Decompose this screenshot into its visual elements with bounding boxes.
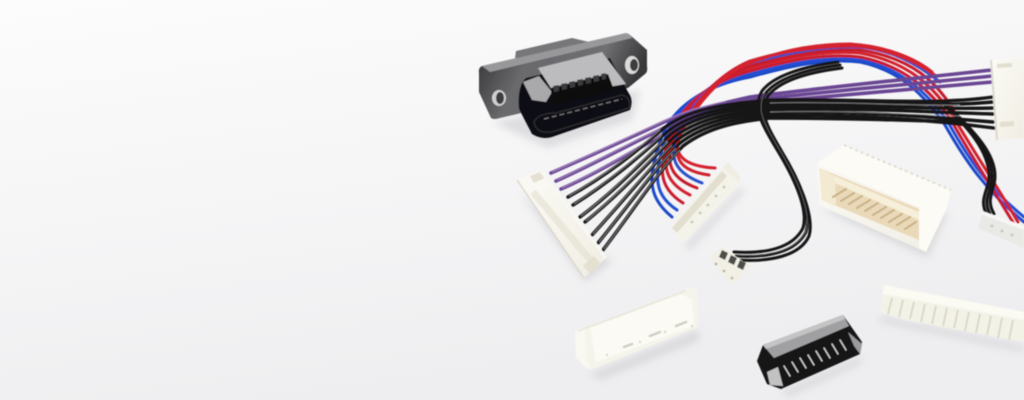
black wires to right lower connector bbox=[944, 104, 995, 214]
three-pin connector bbox=[710, 247, 750, 286]
purple wires bbox=[551, 70, 992, 189]
box header connector bbox=[817, 145, 951, 252]
right wire housing connector bbox=[991, 58, 1024, 140]
right lower connector bbox=[978, 212, 1024, 248]
left wire housing connector bbox=[517, 170, 606, 278]
bottom right comb header bbox=[880, 285, 1024, 342]
bottom black and grey SMT connector bbox=[757, 315, 862, 389]
small connector for red and blue wires bbox=[670, 162, 740, 243]
icon: dark D-sub connector bbox=[479, 33, 647, 138]
bottom white shrouded header bbox=[575, 286, 698, 370]
soft shadows under parts bbox=[492, 90, 1024, 396]
black wires bbox=[568, 97, 994, 250]
red and blue wire harness bbox=[652, 44, 1024, 224]
black-wire loop to 3-pin connector bbox=[734, 62, 842, 260]
